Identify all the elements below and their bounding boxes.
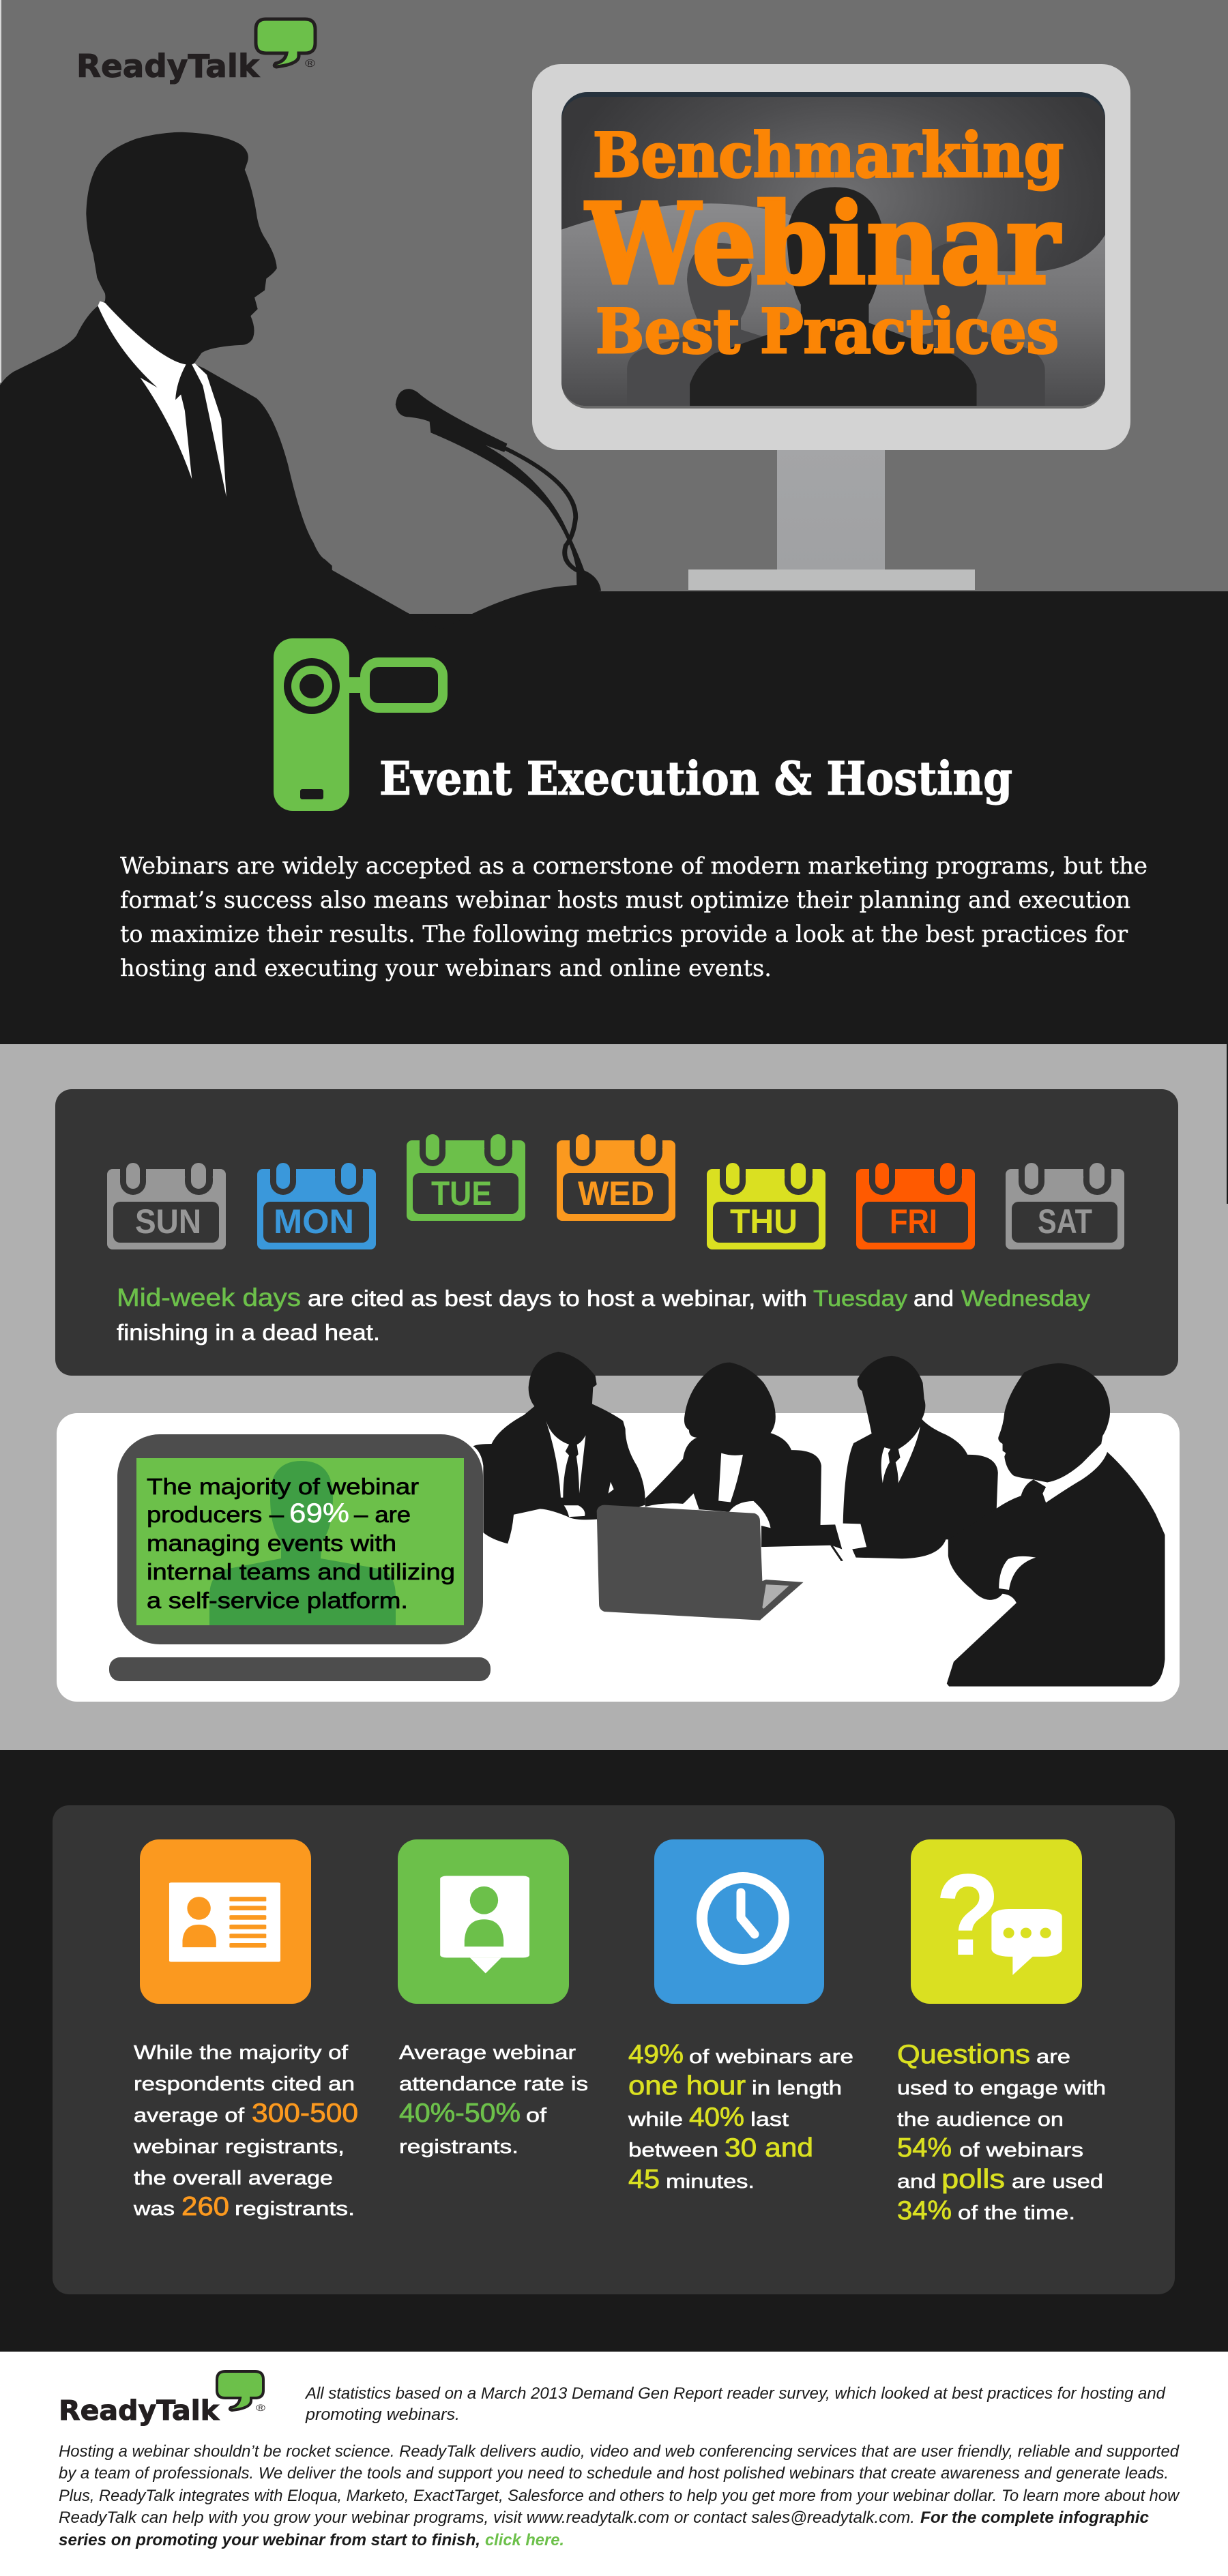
stat text: duration bbox=[628, 2040, 853, 2194]
person 3 bbox=[843, 1356, 1022, 1558]
stat text: questions and polls: the audience on bbox=[897, 2109, 1064, 2131]
monitor frame bbox=[532, 64, 1130, 450]
center laptop bbox=[597, 1505, 804, 1620]
laptop callout text: a self-service platform. bbox=[147, 1588, 408, 1613]
calendar: Friday bbox=[856, 1163, 975, 1249]
stat text: questions and polls: are bbox=[1036, 2046, 1070, 2068]
stat text: registrants: While the majority of bbox=[134, 2042, 349, 2064]
icon: registrants card bbox=[140, 1839, 311, 2004]
laptop callout text: – are bbox=[354, 1502, 411, 1527]
stat text: duration: 45 bbox=[628, 2165, 660, 2194]
stat text: attendance bbox=[399, 2042, 588, 2158]
stat text: registrants: was bbox=[133, 2198, 175, 2220]
stat text: questions and polls: are used bbox=[1012, 2171, 1103, 2193]
laptop callout text: managing events with bbox=[147, 1530, 396, 1556]
stat text: attendance: attendance rate is bbox=[399, 2073, 588, 2095]
dark section background: event execution and hosting bbox=[0, 546, 1228, 1044]
monitor screen bbox=[559, 89, 1112, 416]
stat text: duration: one hour bbox=[628, 2071, 746, 2101]
stat text: duration: in length bbox=[752, 2077, 842, 2099]
best days text: Wednesday bbox=[961, 1286, 1091, 1311]
laptop callout text: 69% bbox=[289, 1498, 349, 1528]
survey note: All statistics based on a March 2013 Demand Gen Report reader survey, which looked at best practices for hosting and bbox=[304, 2384, 1166, 2403]
laptop callout text: internal teams and utilizing bbox=[147, 1559, 455, 1584]
best days text: Mid-week days bbox=[117, 1284, 301, 1312]
stat text: registrants: registrants. bbox=[235, 2198, 355, 2220]
icon: clock bbox=[654, 1839, 824, 2004]
laptop screen silhouette bbox=[209, 1461, 396, 1625]
laptop callout text: The majority of webinar bbox=[147, 1474, 419, 1499]
stat text: registrants: average of bbox=[134, 2105, 245, 2127]
person 1 bbox=[473, 1352, 645, 1543]
presenter silhouette bbox=[0, 132, 409, 655]
about paragraph: ReadyTalk can help with you grow your webinar programs, visit www.readytalk.com or contact sales@readytalk.com. bbox=[59, 2508, 915, 2527]
intro paragraph: format’s success also means webinar hosts must optimize their planning and execution bbox=[120, 887, 1130, 914]
stat text: duration: last bbox=[750, 2109, 789, 2131]
panel: statistics bbox=[53, 1805, 1175, 2294]
monitor stand bbox=[777, 447, 885, 571]
about paragraph: series on promoting your webinar from start to finish, bbox=[59, 2531, 480, 2549]
stat text: questions and polls: used to engage with bbox=[897, 2077, 1106, 2099]
monitor bbox=[532, 64, 1130, 590]
stat text: attendance: Average webinar bbox=[399, 2042, 576, 2064]
calendar: Wednesday: WED bbox=[578, 1174, 654, 1213]
stat text: questions and polls: 54% bbox=[897, 2133, 952, 2163]
stat text: registrants: the overall average bbox=[134, 2167, 333, 2189]
best days text: and bbox=[913, 1286, 954, 1311]
calendar: Tuesday bbox=[407, 1134, 525, 1221]
stat text: questions and polls: of webinars bbox=[959, 2140, 1083, 2161]
stat text: questions and polls: of the time. bbox=[958, 2202, 1075, 2224]
panel: best days bbox=[55, 1089, 1178, 1376]
microphone bbox=[396, 389, 601, 591]
calendar: Thursday bbox=[707, 1163, 825, 1249]
intro paragraph: hosting and executing your webinars and online events. bbox=[120, 955, 772, 982]
logo: ReadyTalk header: ReadyTalk bbox=[76, 48, 260, 85]
calendar: Sunday: SUN bbox=[135, 1202, 201, 1241]
stat text: questions and polls bbox=[897, 2040, 1106, 2225]
intro paragraph: to maximize their results. The following metrics provide a look at the best practices for bbox=[120, 921, 1128, 948]
heading: event execution and hosting: Event Execution & Hosting bbox=[379, 752, 1012, 805]
about paragraph: by a team of professionals. We deliver the tools and support you need to schedule and host polished webinars that create awareness and generate leads. bbox=[59, 2464, 1169, 2483]
logo: ReadyTalk footer: ® bbox=[256, 2402, 266, 2413]
icon: question and chat bubble bbox=[911, 1839, 1082, 2004]
stat text: duration: between bbox=[628, 2140, 718, 2161]
calendar: Saturday bbox=[1006, 1163, 1124, 1249]
stat text: attendance: registrants. bbox=[399, 2136, 518, 2158]
icon: question and chat bubble: ? bbox=[935, 1850, 1000, 1980]
stat text: questions and polls: 34% bbox=[897, 2196, 952, 2225]
stat text: attendance: of bbox=[526, 2105, 547, 2127]
stat text: questions and polls: polls bbox=[941, 2165, 1005, 2194]
panel: self-service platform bbox=[57, 1352, 1180, 1702]
title: Webinar bbox=[585, 179, 1061, 310]
stat text: duration: 40% bbox=[689, 2103, 744, 2132]
stat text: registrants: respondents cited an bbox=[134, 2073, 355, 2095]
best days text bbox=[117, 1284, 1091, 1345]
light gray section background bbox=[0, 1044, 1228, 1750]
survey note: promoting webinars. bbox=[305, 2405, 460, 2424]
stat text: registrants: 300-500 bbox=[252, 2099, 358, 2128]
calendar: Tuesday: TUE bbox=[431, 1174, 492, 1213]
survey note bbox=[304, 2384, 1166, 2424]
footer background bbox=[0, 2352, 1228, 2576]
about paragraph: Plus, ReadyTalk integrates with Eloqua, Marketo, ExactTarget, Salesforce and others to help you get more from your webinar dollar. To learn more about how bbox=[59, 2487, 1180, 2505]
calendar: Thursday: THU bbox=[730, 1202, 798, 1241]
intro paragraph: Webinars are widely accepted as a cornerstone of modern marketing programs, but the bbox=[120, 853, 1147, 880]
icon: video camera bbox=[274, 638, 443, 811]
stat text: duration: 49% bbox=[628, 2040, 684, 2069]
icon: attendee speech bubble bbox=[398, 1839, 569, 2004]
logo: ReadyTalk footer bbox=[59, 2371, 266, 2427]
intro paragraph bbox=[120, 853, 1147, 982]
logo: ReadyTalk header: ® bbox=[305, 58, 315, 70]
monitor base bbox=[688, 569, 975, 590]
person 2 bbox=[645, 1363, 842, 1561]
laptop callout text: producers – bbox=[147, 1502, 284, 1527]
stat text: duration: 30 and bbox=[725, 2133, 813, 2163]
about paragraph: click here. bbox=[485, 2531, 564, 2549]
title: Best Practices bbox=[596, 295, 1059, 368]
about paragraph bbox=[59, 2442, 1180, 2549]
left laptop bbox=[109, 1434, 491, 1681]
stat text: attendance: 40%-50% bbox=[399, 2099, 521, 2128]
logo: ReadyTalk header bbox=[76, 19, 315, 85]
best days text: are cited as best days to host a webinar, with bbox=[308, 1286, 807, 1311]
stat text: duration: minutes. bbox=[666, 2171, 755, 2193]
best days text: finishing in a dead heat. bbox=[117, 1320, 380, 1345]
stat text: duration: of webinars are bbox=[689, 2046, 853, 2068]
stat text: registrants: 260 bbox=[181, 2192, 229, 2221]
dark section background: statistics bbox=[0, 1750, 1228, 2352]
calendar: Wednesday bbox=[557, 1134, 675, 1221]
calendar: Monday bbox=[257, 1163, 376, 1249]
title bbox=[585, 119, 1064, 368]
calendar: Friday: FRI bbox=[890, 1202, 937, 1241]
stat text: registrants bbox=[133, 2042, 358, 2221]
calendar: Monday: MON bbox=[274, 1202, 354, 1241]
title: Benchmarking bbox=[593, 119, 1064, 192]
stat text: questions and polls: and bbox=[897, 2171, 936, 2193]
meeting silhouettes bbox=[473, 1352, 1165, 1687]
best days text: Tuesday bbox=[813, 1286, 908, 1311]
laptop callout text bbox=[147, 1474, 455, 1613]
about paragraph: For the complete infographic bbox=[920, 2508, 1149, 2527]
top background bbox=[0, 0, 1228, 614]
logo: ReadyTalk footer: ReadyTalk bbox=[59, 2395, 220, 2427]
audience silhouettes bbox=[627, 187, 1045, 407]
stat text: duration: while bbox=[628, 2109, 683, 2131]
about paragraph: Hosting a webinar shouldn’t be rocket science. ReadyTalk delivers audio, video and web conferencing services that are user friendly, reliable and supported bbox=[59, 2442, 1180, 2461]
calendar: Sunday bbox=[107, 1163, 226, 1249]
calendar: Saturday: SAT bbox=[1038, 1202, 1092, 1241]
person 4 foreground bbox=[947, 1363, 1165, 1687]
stat text: registrants: webinar registrants, bbox=[133, 2136, 345, 2158]
stat text: questions and polls: Questions bbox=[897, 2040, 1030, 2069]
